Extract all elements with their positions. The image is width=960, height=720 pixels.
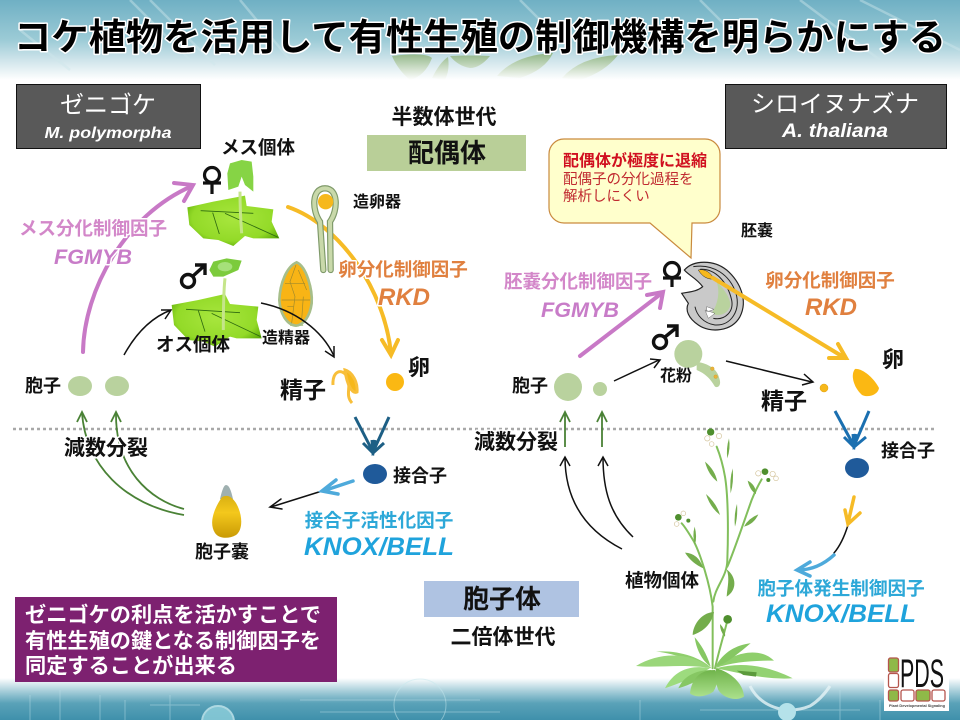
heading: gametophyte: 配偶体 bbox=[408, 138, 486, 168]
callout: purple conclusion: 有性生殖の鍵となる制御因子を bbox=[25, 629, 321, 653]
icon: sporangium bbox=[212, 485, 241, 538]
label: sperm right: 精子 bbox=[761, 388, 807, 414]
label: orange factor right: 卵分化制御因子 bbox=[765, 270, 895, 291]
arrow: spore to male bbox=[124, 310, 171, 355]
icon: PDS logo bbox=[884, 652, 949, 711]
arrow: male to sperm bbox=[261, 303, 334, 357]
label: meiosis left: 減数分裂 bbox=[64, 436, 148, 460]
label: orange factor right: RKD bbox=[805, 294, 857, 321]
label: pollen: 花粉 bbox=[660, 366, 692, 385]
heading: gametophyte bbox=[367, 135, 526, 171]
arrows: fertilization right bbox=[835, 411, 869, 447]
callout: reduced gametophyte note bbox=[549, 139, 720, 258]
title: コケ植物を活用して有性生殖の制御機構を明らかにする bbox=[14, 16, 946, 58]
label: pink factor left bbox=[19, 218, 167, 269]
arrows: fertilization left bbox=[355, 417, 389, 453]
panel: Marchantia species label bbox=[16, 84, 200, 148]
top banner background bbox=[0, 0, 960, 80]
label: egg left: 卵 bbox=[408, 355, 430, 380]
callout: reduced gametophyte note: 配偶子の分化過程を bbox=[563, 171, 694, 188]
label: plant: 植物個体 bbox=[625, 570, 699, 591]
bottom banner background bbox=[0, 678, 960, 720]
icon: ovule bbox=[682, 262, 743, 330]
icon: egg left bbox=[386, 373, 404, 391]
label: spore left: 胞子 bbox=[25, 376, 61, 396]
arrows: meiosis left bbox=[77, 412, 184, 515]
panel: Marchantia species label: ゼニゴケ bbox=[60, 92, 156, 119]
arrow: microspore to pollen bbox=[614, 359, 660, 381]
heading: diploid generation: 二倍体世代 bbox=[450, 626, 556, 649]
icon: antheridium bbox=[279, 262, 312, 326]
label: zygote right: 接合子 bbox=[881, 441, 935, 461]
label: male plant: オス個体 bbox=[156, 334, 230, 355]
icon: Arabidopsis plant bbox=[636, 428, 793, 699]
panel: Arabidopsis species label bbox=[726, 84, 946, 148]
label: blue factor left: 接合子活性化因子 bbox=[305, 510, 453, 531]
heading: sporophyte bbox=[424, 581, 579, 617]
label: blue factor right: KNOX/BELL bbox=[766, 600, 916, 628]
icon: spores left bbox=[68, 376, 129, 396]
icon: male thallus bbox=[172, 258, 262, 347]
icon: zygote left bbox=[363, 464, 387, 484]
icon: archegonium bbox=[314, 188, 336, 270]
icon: sperm left bbox=[333, 370, 357, 403]
label: blue factor left bbox=[304, 510, 454, 561]
label: blue factor right bbox=[757, 578, 925, 628]
arrow: egg differentiation orange bbox=[288, 207, 398, 355]
label: antheridium: 造精器 bbox=[262, 328, 310, 347]
arrow: female differentiation pink bbox=[83, 183, 193, 352]
label: female plant: メス個体 bbox=[221, 137, 295, 158]
icon: male symbol right bbox=[654, 326, 677, 348]
callout: reduced gametophyte note: 解析しにくい bbox=[563, 188, 650, 205]
label: sporangium: 胞子嚢 bbox=[195, 542, 249, 562]
arrow: pollen to sperm bbox=[726, 361, 813, 385]
label: embryo sac: 胚嚢 bbox=[741, 222, 773, 240]
callout: purple conclusion: ゼニゴケの利点を活かすことで bbox=[25, 602, 321, 627]
panel: Marchantia species label: M. polymorpha bbox=[44, 125, 172, 142]
label: orange factor right bbox=[765, 270, 895, 321]
arrow: egg differentiation right bbox=[713, 278, 846, 358]
arrow: zygote to sporangium bbox=[270, 480, 353, 509]
icon: pollen bbox=[674, 340, 720, 387]
icon: female symbol right bbox=[663, 262, 681, 287]
label: orange factor left bbox=[338, 259, 468, 311]
arrow: embryo sac differentiation pink bbox=[580, 292, 663, 356]
label: sperm left: 精子 bbox=[280, 377, 326, 403]
label: pink factor left: メス分化制御因子 bbox=[19, 218, 167, 239]
icon: sperm right bbox=[820, 384, 828, 392]
heading: haploid generation: 半数体世代 bbox=[392, 106, 496, 129]
callout: purple conclusion bbox=[15, 597, 337, 682]
label: zygote left: 接合子 bbox=[393, 466, 447, 486]
callout: purple conclusion: 同定することが出来る bbox=[25, 653, 237, 678]
label: meiosis right: 減数分裂 bbox=[474, 430, 558, 454]
panel: Arabidopsis species label: A. thaliana bbox=[781, 121, 888, 142]
icon: PDS logo: Plant Developmental Signaling bbox=[889, 703, 946, 708]
label: pink factor right bbox=[504, 271, 652, 322]
dotted generation divider bbox=[13, 428, 936, 430]
label: spore right: 胞子 bbox=[512, 376, 548, 396]
label: pink factor left: FGMYB bbox=[54, 246, 132, 269]
heading: sporophyte: 胞子体 bbox=[463, 584, 541, 614]
icon: zygote right bbox=[845, 458, 869, 478]
label: archegonium: 造卵器 bbox=[353, 192, 401, 211]
label: pink factor right: FGMYB bbox=[541, 299, 619, 322]
arrow: zygote to sporophyte bbox=[797, 497, 860, 576]
label: blue factor left: KNOX/BELL bbox=[304, 533, 454, 561]
label: orange factor left: RKD bbox=[378, 284, 430, 311]
arrows: meiosis right green bbox=[560, 412, 607, 447]
icon: female symbol left bbox=[203, 168, 221, 194]
icon: egg right bbox=[853, 369, 879, 396]
label: blue factor right: 胞子体発生制御因子 bbox=[757, 578, 925, 599]
icon: male symbol left bbox=[182, 265, 205, 288]
arrows: plant to spores bbox=[560, 457, 633, 549]
callout: reduced gametophyte note: 配偶体が極度に退縮 bbox=[563, 151, 707, 170]
icon: spores right bbox=[554, 373, 607, 401]
label: egg right: 卵 bbox=[882, 347, 904, 372]
panel: Arabidopsis species label: シロイヌナズナ bbox=[751, 91, 919, 118]
icon: female thallus bbox=[187, 160, 279, 246]
label: orange factor left: 卵分化制御因子 bbox=[338, 259, 468, 280]
label: pink factor right: 胚嚢分化制御因子 bbox=[504, 271, 652, 292]
